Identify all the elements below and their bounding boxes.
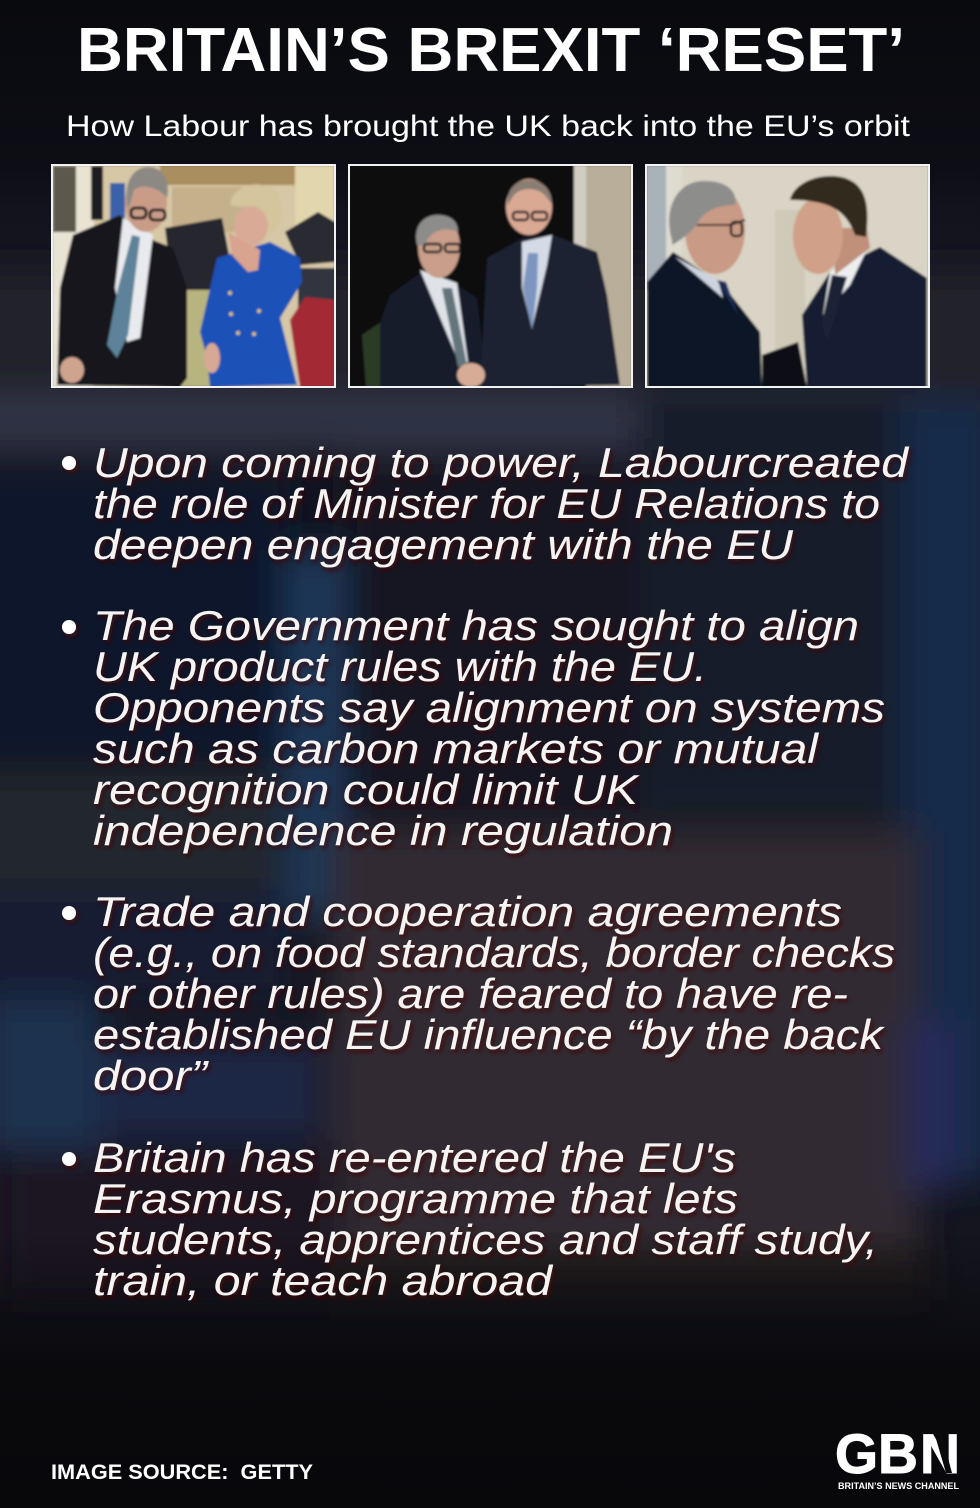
bullet 2: product rules alignment: recognition could limit UK <box>93 766 640 813</box>
bullet 1: Minister for EU Relations <box>62 439 910 568</box>
bullet 3: trade and cooperation agreements: door” <box>93 1052 209 1099</box>
bullet 4: Erasmus programme: Erasmus, programme that lets <box>93 1175 738 1222</box>
bullet 4: Erasmus programme <box>62 1134 878 1304</box>
bullet 3: trade and cooperation agreements: or other rules) are feared to have re- <box>93 970 848 1017</box>
bullet 3: trade and cooperation agreements: (e.g., on food standards, border checks <box>93 929 895 976</box>
bullet 3: trade and cooperation agreements: established EU influence “by the back <box>93 1011 885 1058</box>
photo: Starmer and von der Leyen <box>52 165 335 387</box>
logo: GB News: N <box>920 1422 960 1485</box>
bullet 4: Erasmus programme: Britain has re-entered the EU's <box>93 1134 736 1181</box>
bullet 4: Erasmus programme: train, or teach abroad <box>93 1257 554 1304</box>
bullet list <box>62 439 910 1304</box>
logo: GB News: BRITAIN’S NEWS CHANNEL <box>838 1481 959 1492</box>
logo: GB News <box>835 1422 960 1492</box>
bullet 2: product rules alignment: such as carbon markets or mutual <box>93 725 820 772</box>
image source credit: IMAGE SOURCE: GETTY <box>51 1461 313 1484</box>
title: BRITAIN’S BREXIT ‘RESET’ <box>77 16 905 85</box>
bullet 1: Minister for EU Relations: deepen engagement with the EU <box>93 521 794 568</box>
bullet 2: product rules alignment: The Government has sought to align <box>93 602 859 649</box>
bullet 2: product rules alignment: UK product rules with the EU. <box>93 643 707 690</box>
bullet 2: product rules alignment: Opponents say alignment on systems <box>93 684 885 731</box>
bullet 4: Erasmus programme: students, apprentices and staff study, <box>93 1216 878 1263</box>
bullet 2: product rules alignment: independence in regulation <box>93 807 673 854</box>
bullet 3: trade and cooperation agreements <box>62 888 895 1099</box>
subtitle: How Labour has brought the UK back into the EU’s orbit <box>66 110 911 143</box>
photo: Starmer and Macron <box>646 165 929 387</box>
bullet 3: trade and cooperation agreements: Trade and cooperation agreements <box>93 888 842 935</box>
bullet 1: Minister for EU Relations: the role of Minister for EU Relations to <box>93 480 880 527</box>
logo: GB News: GB <box>835 1422 918 1485</box>
bullet 1: Minister for EU Relations: Upon coming to power, Labourcreated <box>93 439 910 486</box>
photo: Starmer and Merz <box>349 165 632 387</box>
bullet 2: product rules alignment <box>62 602 885 854</box>
